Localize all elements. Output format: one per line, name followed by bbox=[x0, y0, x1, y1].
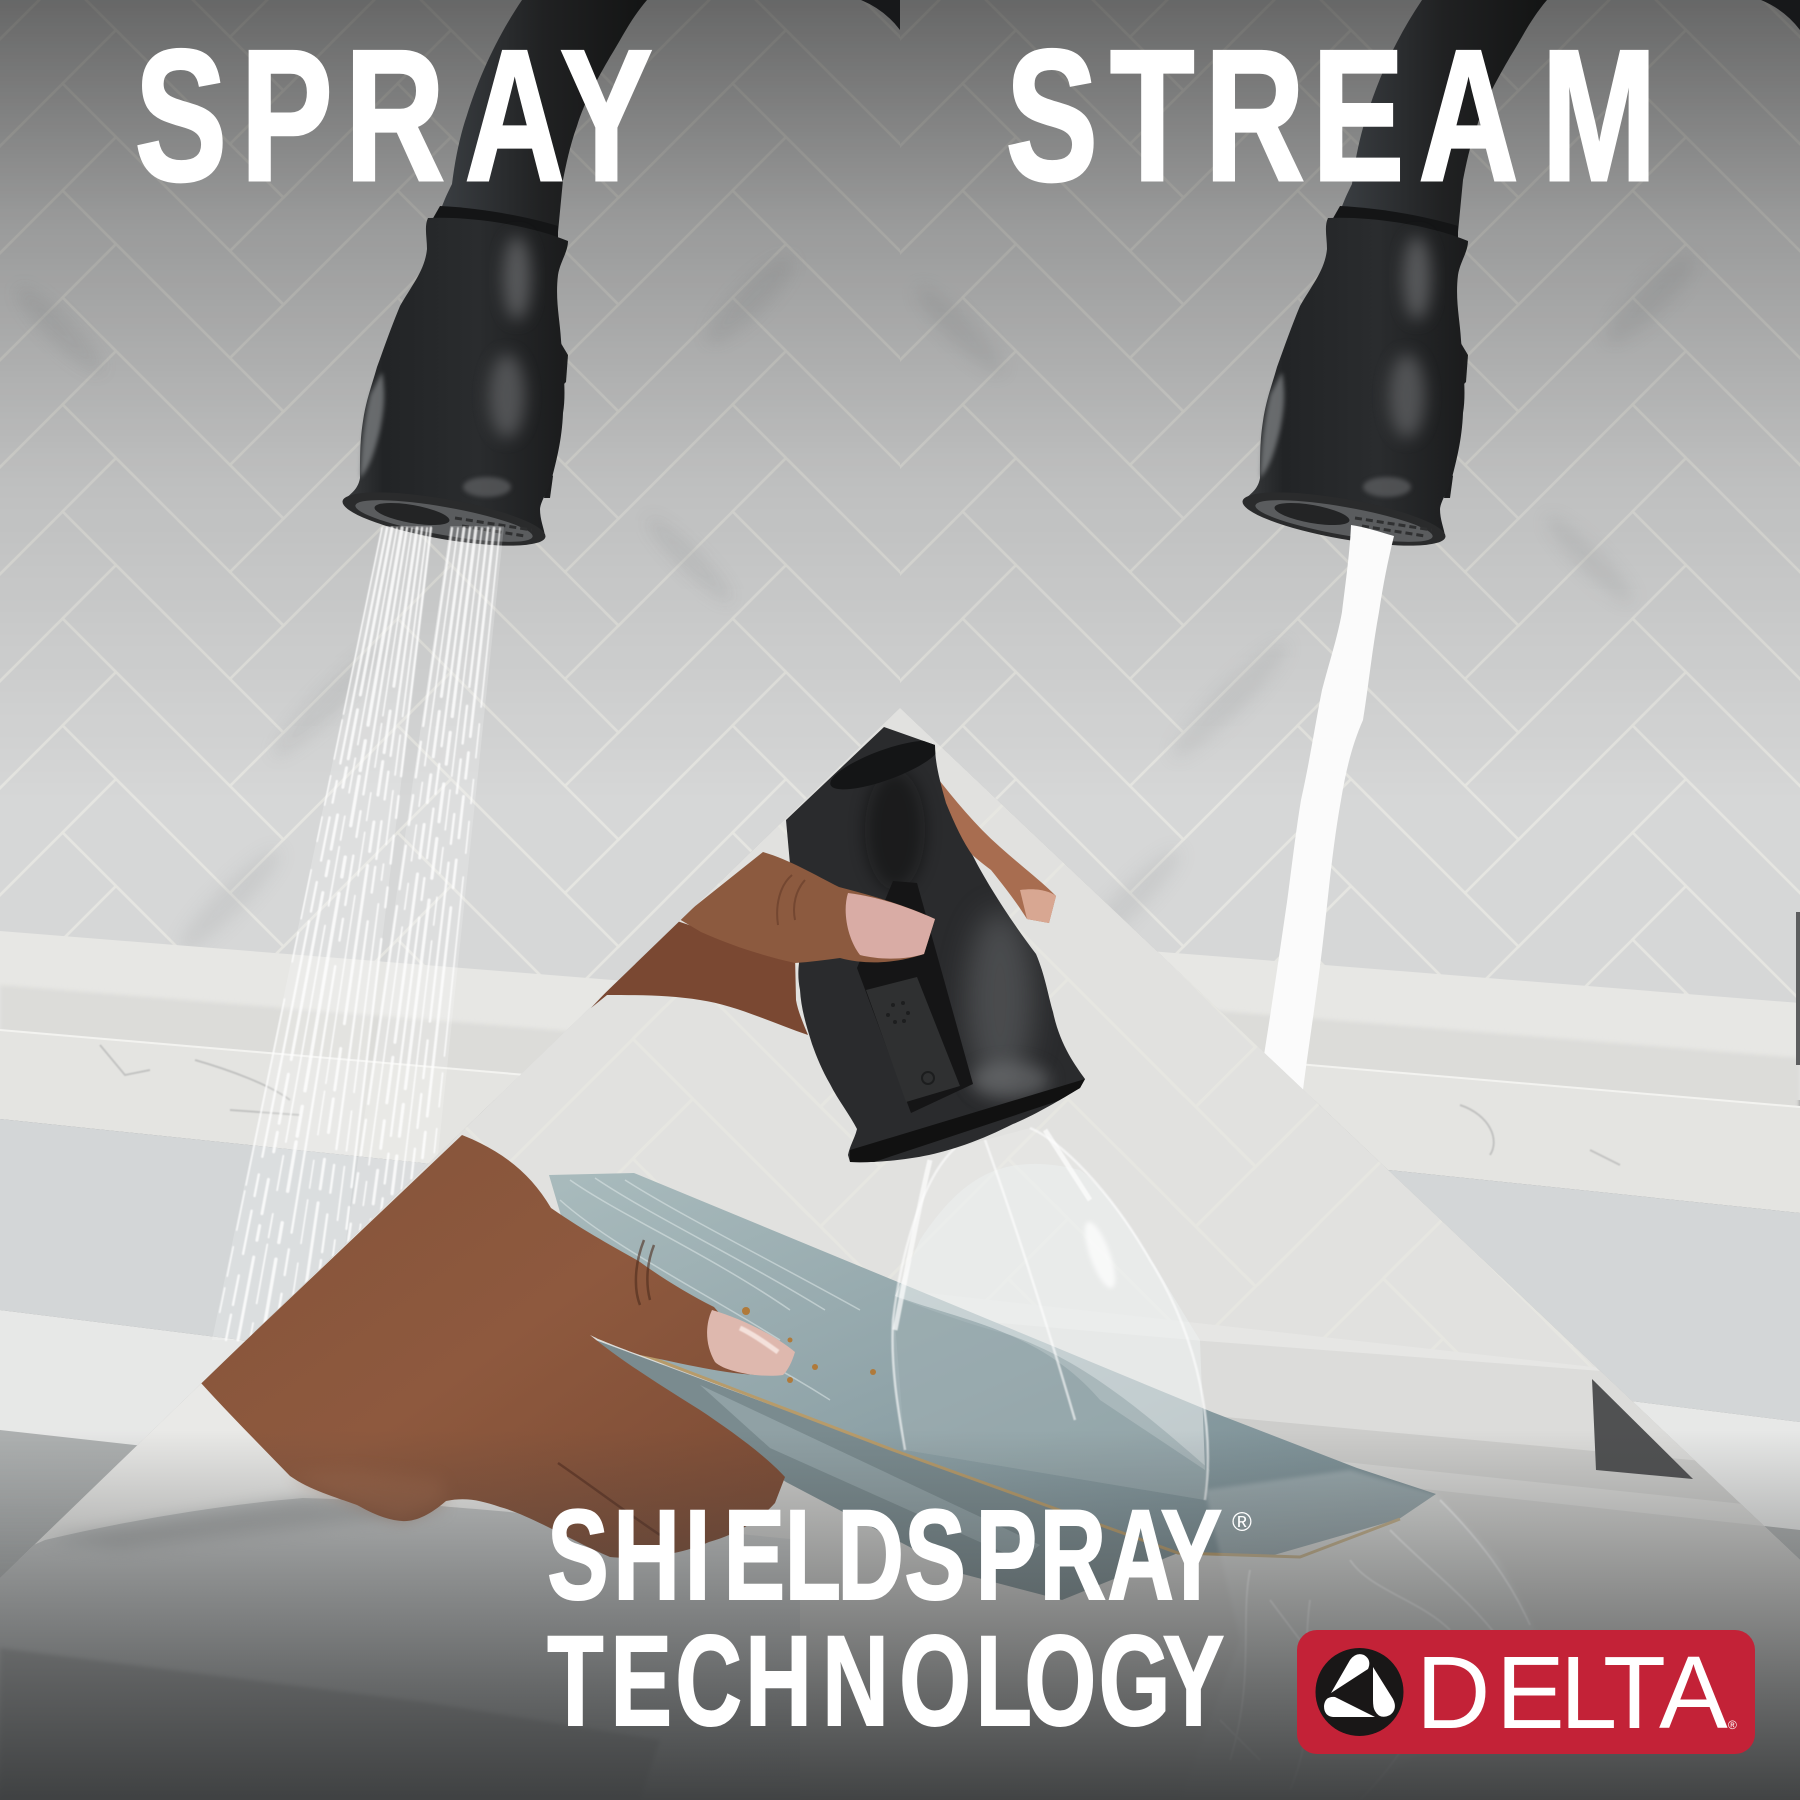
heading: shieldspray technology bbox=[547, 1483, 1252, 1753]
sprayer wand in hand bbox=[591, 727, 1085, 1170]
spray water streams bbox=[212, 526, 504, 1340]
panel: spray bbox=[0, 0, 900, 1700]
faucet base at right bbox=[1592, 1379, 1693, 1479]
line two: TECHNOLOGY bbox=[547, 1609, 1224, 1753]
back sill and counter bbox=[592, 1336, 1694, 1460]
middle finger bbox=[591, 920, 808, 1035]
plate bbox=[549, 1173, 1436, 1600]
panel: shieldspray bbox=[0, 700, 1800, 1800]
faucet base sliver bbox=[1796, 912, 1800, 1065]
crumbs bbox=[742, 1307, 876, 1383]
registered mark: ® bbox=[1232, 1507, 1252, 1537]
heading: spray: SPRAY bbox=[135, 11, 652, 220]
water dome bbox=[892, 1128, 1210, 1500]
splash over plate edge bbox=[1207, 1470, 1530, 1702]
bottom shading bbox=[0, 1430, 1800, 1800]
line one: SHIELDSPRAY bbox=[547, 1483, 1222, 1627]
far fingers bbox=[935, 775, 1056, 923]
registered mark small: ® bbox=[1728, 1718, 1737, 1732]
trigger recess bbox=[857, 881, 973, 1113]
water jets leaving sprayer bbox=[895, 1160, 930, 1330]
solid water stream bbox=[1264, 525, 1394, 1090]
icon: delta emblem bbox=[1316, 1648, 1404, 1736]
heading: stream: STREAM bbox=[1006, 11, 1657, 220]
left counter surfaces bbox=[34, 1384, 516, 1545]
wordmark: DELTA bbox=[1416, 1635, 1728, 1750]
logo: delta bbox=[1297, 1630, 1755, 1754]
panel: stream bbox=[900, 0, 1800, 1700]
trigger button bbox=[866, 977, 960, 1102]
lower hand holding plate bbox=[201, 1135, 795, 1558]
index finger bbox=[679, 852, 935, 963]
red badge bbox=[1297, 1630, 1755, 1754]
